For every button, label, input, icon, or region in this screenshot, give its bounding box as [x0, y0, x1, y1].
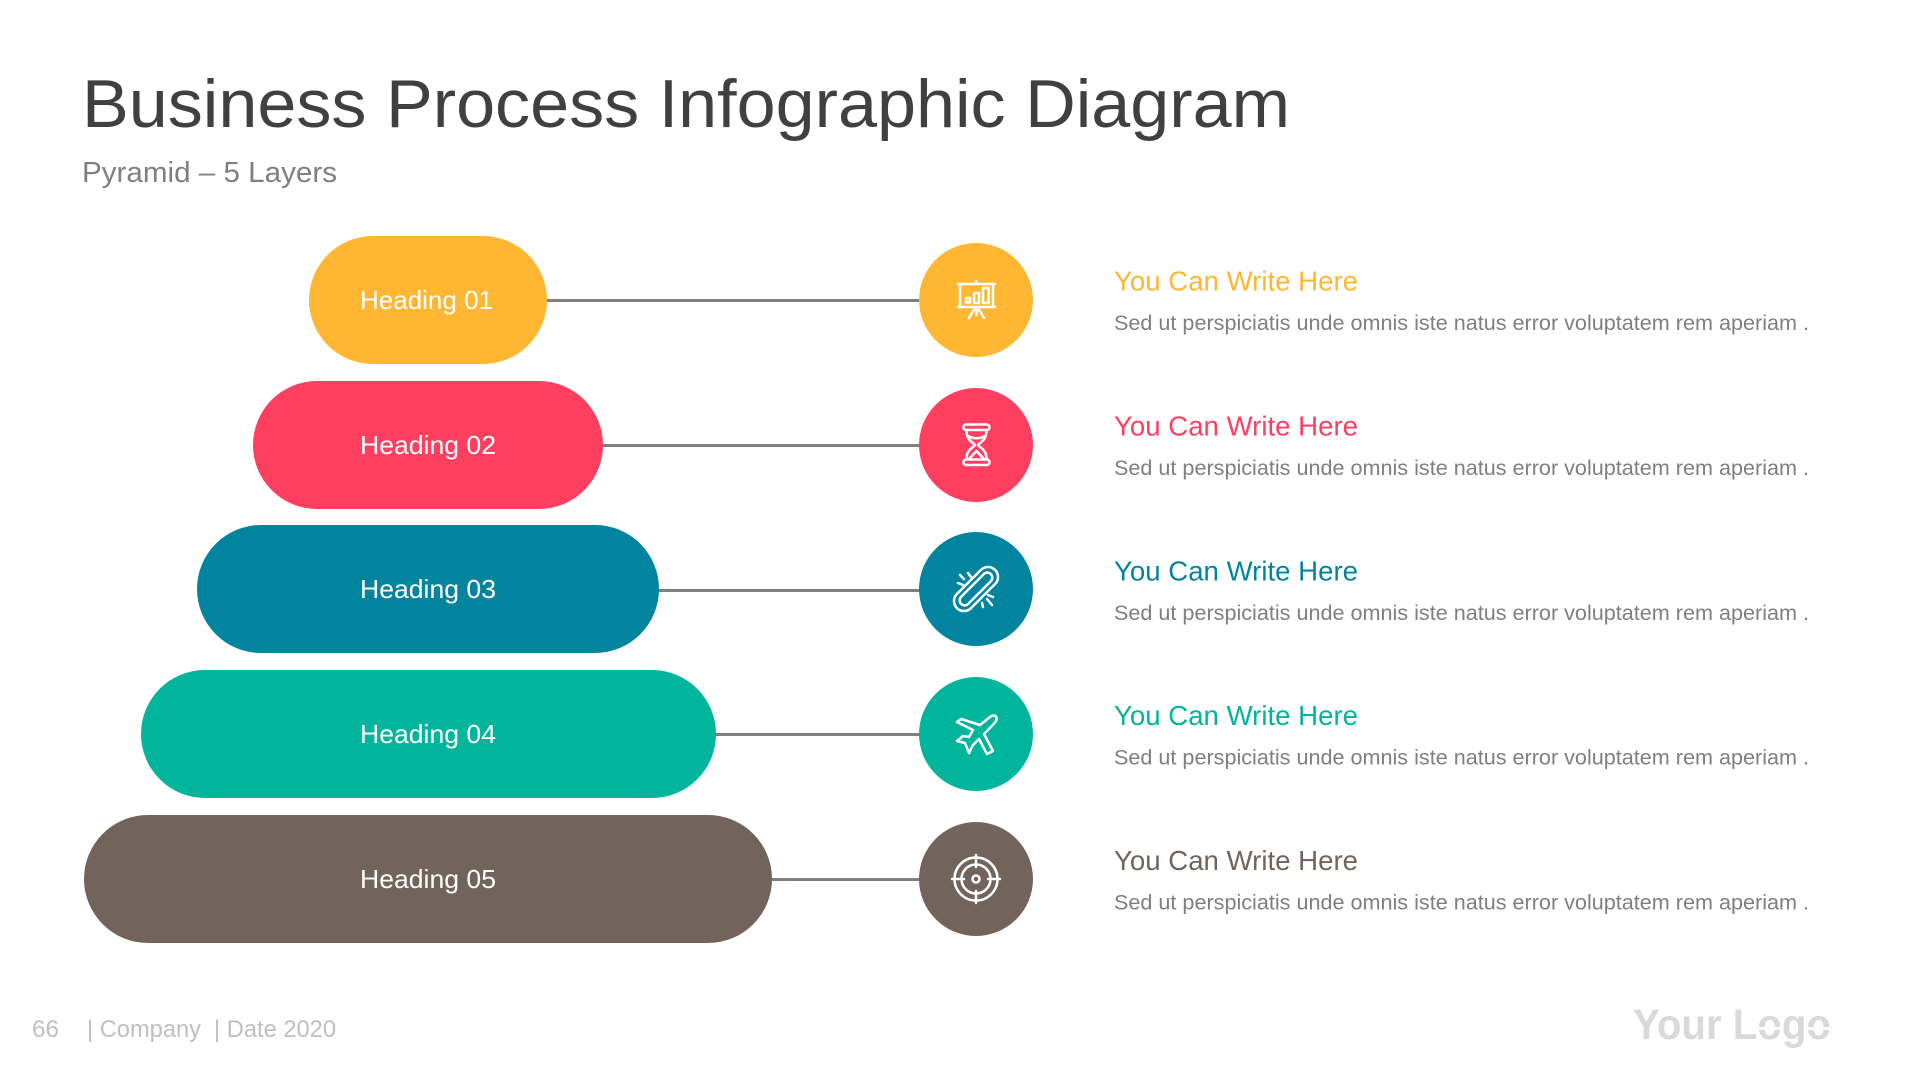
text block 4: [1114, 700, 1809, 770]
pyramid layer: heading 03: Heading 03: [360, 574, 496, 604]
pyramid layer: heading 03: [197, 525, 659, 653]
icon: broken chain link: [919, 532, 1033, 646]
footer: page number, company, date: | Company: [87, 1016, 201, 1043]
icon: airplane: [919, 677, 1033, 791]
text block 4: Sed ut perspiciatis unde omnis iste natus error voluptatem rem aperiam .: [1114, 746, 1809, 770]
text block 5: Sed ut perspiciatis unde omnis iste natus error voluptatem rem aperiam .: [1114, 892, 1809, 914]
text block 2: Sed ut perspiciatis unde omnis iste natus error voluptatem rem aperiam .: [1114, 457, 1809, 480]
text block 4: You Can Write Here: [1114, 700, 1358, 731]
pyramid layer: heading 02: Heading 02: [360, 430, 496, 460]
footer: page number, company, date: | Date 2020: [214, 1016, 336, 1043]
pyramid layer: heading 05: Heading 05: [360, 864, 496, 894]
pyramid layer: heading 01: Heading 01: [360, 285, 493, 315]
text block 3: You Can Write Here: [1114, 556, 1358, 586]
logo: Your Logo: [1633, 1001, 1831, 1049]
pyramid layer: heading 02: [253, 381, 603, 509]
pyramid layer: heading 04: Heading 04: [360, 719, 496, 749]
icon: hourglass: [919, 388, 1033, 502]
title: Business Process Infographic Diagram: [82, 66, 1290, 142]
subtitle: Pyramid – 5 Layers: [82, 157, 337, 189]
text block 5: You Can Write Here: [1114, 845, 1358, 876]
text block 2: You Can Write Here: [1114, 410, 1358, 442]
footer: page number, company, date: [32, 1016, 336, 1043]
connector lines: [546, 300, 920, 880]
text block 5: [1114, 845, 1809, 914]
pyramid layer: heading 01: [309, 236, 547, 364]
text block 3: Sed ut perspiciatis unde omnis iste natus error voluptatem rem aperiam .: [1114, 602, 1809, 625]
text block 1: Sed ut perspiciatis unde omnis iste natus error voluptatem rem aperiam .: [1114, 312, 1809, 335]
footer: page number, company, date: 66: [32, 1016, 59, 1043]
text block 3: [1114, 556, 1809, 625]
icon: presentation board: [919, 243, 1033, 357]
pyramid layer: heading 05: [84, 815, 772, 943]
icon: target: [919, 822, 1033, 936]
text block 2: [1114, 410, 1809, 480]
text block 1: [1114, 266, 1809, 335]
text block 1: You Can Write Here: [1114, 266, 1358, 296]
pyramid layer: heading 04: [141, 670, 716, 798]
